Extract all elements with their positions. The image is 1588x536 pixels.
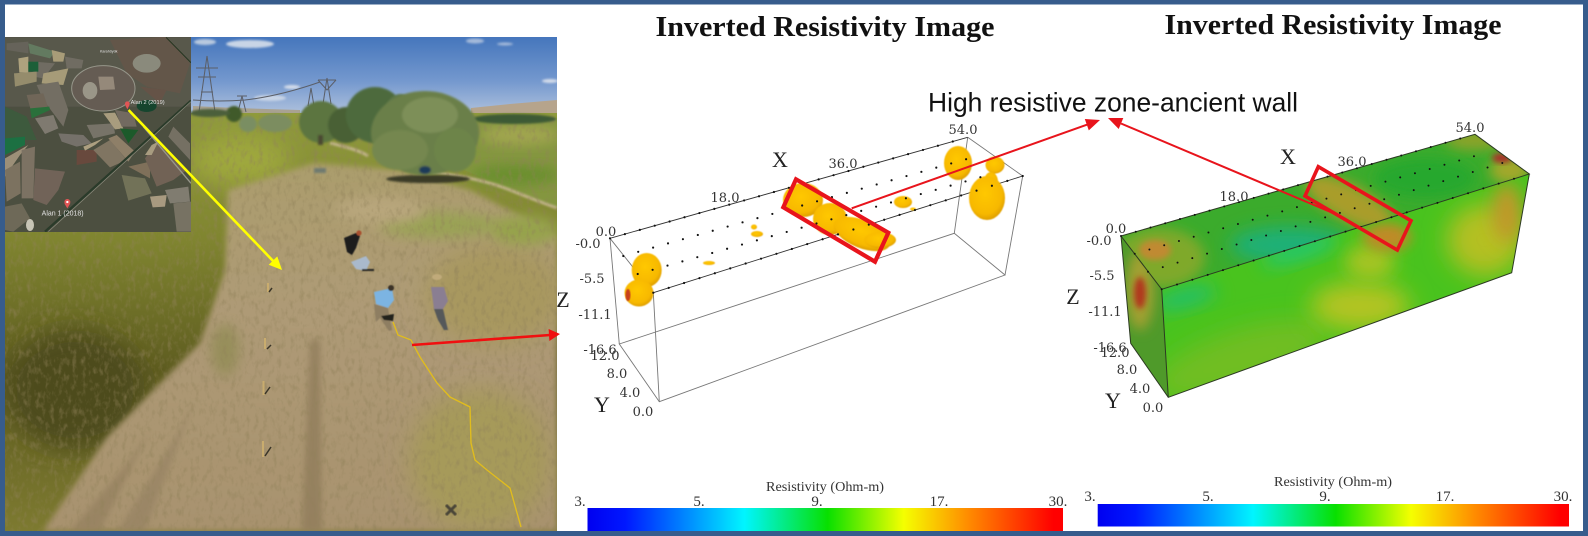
colour legend: left: 30. [1049, 494, 1067, 510]
colour legend: left: Resistivity (Ohm-m) [766, 480, 884, 495]
axis tick labels: -0.0 [575, 237, 601, 252]
top face [1122, 134, 1528, 288]
highlight box: right model [1305, 167, 1411, 250]
front face [1162, 174, 1529, 396]
axis tick labels: -11.1 [578, 308, 612, 323]
axis tick labels: 12.0 [1101, 346, 1129, 361]
chart: 3D iso-surface model [556, 123, 1023, 420]
colour legend: right: 30. [1554, 489, 1572, 505]
colour legend: left: 5. [693, 494, 705, 510]
power pylons [193, 56, 336, 112]
axis tick labels: -11.1 [1088, 305, 1122, 320]
axis tick labels: 18.0 [1220, 190, 1248, 205]
axis letters: Z [1066, 284, 1080, 309]
colour legend: right: 17. [1436, 489, 1454, 505]
axis tick labels: 54.0 [1456, 121, 1484, 136]
axis tick labels [575, 123, 977, 420]
axis tick labels: 4.0 [620, 386, 640, 401]
axis tick labels: 54.0 [949, 123, 977, 138]
survey stakes [263, 283, 268, 457]
axis tick labels [1086, 121, 1484, 416]
map labels and pins [42, 49, 165, 218]
axis tick labels: -5.5 [1089, 269, 1115, 284]
colour legend: right [1084, 475, 1572, 526]
tree line [190, 87, 556, 145]
axis letters [556, 147, 788, 417]
colour legend: left: 17. [930, 494, 948, 510]
axis letters: X [772, 147, 788, 172]
yellow cable [393, 322, 521, 527]
left face [1122, 238, 1168, 396]
axis letters: Y [1105, 388, 1121, 413]
arrow: red from photo to model [412, 329, 560, 345]
axis tick labels: 0.0 [633, 405, 653, 420]
axis letters [1066, 144, 1296, 413]
axis tick labels: -16.6 [1093, 341, 1127, 356]
drone shadow [446, 505, 456, 515]
axis tick labels: 36.0 [1338, 155, 1366, 170]
map labels and pins: Karahöyük [100, 49, 118, 53]
arrow: yellow from map to survey line [129, 110, 282, 270]
axis tick labels: 36.0 [829, 157, 857, 172]
electrode dots [1121, 134, 1529, 289]
axis tick labels: 0.0 [1106, 222, 1126, 237]
pale track [330, 143, 557, 208]
axis tick labels: 0.0 [1143, 401, 1163, 416]
dirt strip [43, 163, 557, 531]
axis tick labels: -0.0 [1086, 234, 1112, 249]
axis letters: Y [594, 392, 610, 417]
axis tick labels: 0.0 [596, 225, 616, 240]
heading: left: Inverted Resistivity Image [656, 11, 995, 43]
right meadow [480, 118, 557, 206]
axis letters: X [1280, 144, 1296, 169]
map labels and pins: Alan 1 (2018) [42, 211, 84, 218]
axis tick labels: 18.0 [711, 191, 739, 206]
axis tick labels: 12.0 [591, 349, 619, 364]
axis tick labels: 4.0 [1130, 382, 1150, 397]
axis tick labels: 8.0 [607, 367, 627, 382]
axis tick labels: 8.0 [1117, 363, 1137, 378]
high-resistivity blobs [624, 146, 1005, 306]
colour legend: right: 9. [1319, 489, 1331, 505]
chart: 3D solid model [1066, 121, 1540, 416]
panel: field photo [5, 37, 565, 531]
electrode dots [610, 137, 1023, 293]
colour legend: right: 3. [1084, 489, 1096, 505]
arrow: left model to callout [852, 119, 1100, 208]
box wireframe [610, 137, 1023, 402]
axis letters: Z [556, 287, 570, 312]
axis tick labels: -16.6 [583, 343, 617, 358]
colour legend: right: Resistivity (Ohm-m) [1274, 475, 1392, 490]
highlight box: left model [783, 179, 888, 262]
arrow: right model to callout [1108, 118, 1340, 216]
heading: right: Inverted Resistivity Image [1164, 9, 1502, 41]
colour legend: left: 9. [811, 494, 823, 510]
axis tick labels: -5.5 [579, 272, 605, 287]
colour legend: left [574, 480, 1067, 531]
box edges [1121, 134, 1529, 397]
callout: high resistive zone: High resistive zone-ancient wall [928, 88, 1298, 118]
people [344, 230, 448, 331]
map labels and pins: Alan 2 (2019) [131, 100, 165, 106]
colour legend: left: 3. [574, 494, 586, 510]
inset satellite map [5, 37, 191, 232]
colour legend: right: 5. [1202, 489, 1214, 505]
